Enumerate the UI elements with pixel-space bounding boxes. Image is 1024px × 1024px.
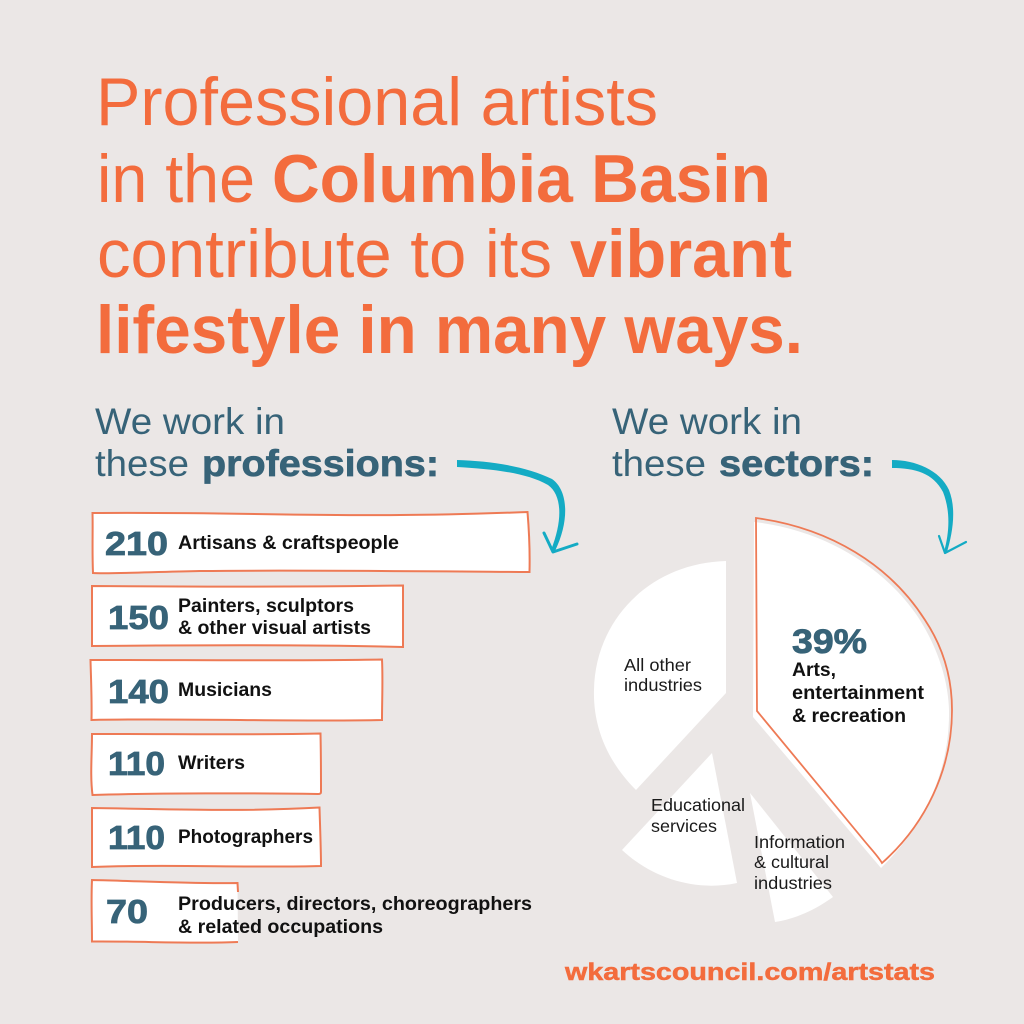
bar: musicians: 140 bbox=[108, 673, 169, 710]
bar: musicians bbox=[90, 660, 382, 721]
bar: artisans: Artisans & craftspeople bbox=[178, 533, 399, 554]
slice: educational services bbox=[622, 753, 745, 886]
slice: information and cultural industries: industries bbox=[754, 873, 832, 893]
bar: musicians: Musicians bbox=[178, 680, 272, 701]
slice: arts, entertainment and recreation: & recreation bbox=[792, 706, 906, 727]
bar: painters: & other visual artists bbox=[178, 618, 371, 639]
slice: arts, entertainment and recreation: 39% bbox=[792, 623, 867, 661]
slice: arts, entertainment and recreation bbox=[753, 518, 952, 868]
bar: producers: & related occupations bbox=[178, 917, 383, 938]
heading: professions: We work in bbox=[95, 401, 285, 442]
heading: sectors: sectors: bbox=[719, 443, 874, 484]
slice: information and cultural industries: & cultural bbox=[754, 852, 829, 872]
slice: information and cultural industries: Information bbox=[754, 832, 845, 852]
bar: writers: Writers bbox=[178, 753, 245, 774]
bar: artisans: 210 bbox=[105, 525, 168, 562]
bar: painters bbox=[92, 586, 403, 647]
bar: painters: Painters, sculptors bbox=[178, 596, 354, 617]
pie chart: sectors bbox=[594, 518, 952, 922]
slice: educational services: Educational bbox=[651, 795, 745, 815]
source link: wkartscouncil.com/artstats bbox=[564, 959, 935, 986]
bar: artisans bbox=[92, 512, 530, 573]
title: Professional artists bbox=[96, 64, 658, 140]
bar: photographers: Photographers bbox=[178, 827, 313, 848]
slice: arts, entertainment and recreation: Arts, bbox=[792, 660, 836, 681]
slice: educational services: services bbox=[651, 816, 717, 836]
slice: all other industries: All other bbox=[624, 655, 691, 675]
slice: information and cultural industries bbox=[750, 793, 845, 922]
slice: all other industries bbox=[594, 561, 726, 790]
heading: sectors: We work in bbox=[612, 401, 802, 442]
slice: arts, entertainment and recreation: entertainment bbox=[792, 683, 925, 704]
title: contribute to its bbox=[97, 216, 552, 292]
arrow: professions to bars bbox=[457, 460, 577, 552]
bar: producers: Producers, directors, choreographers bbox=[178, 894, 532, 915]
title bbox=[96, 64, 803, 368]
title: lifestyle in many ways. bbox=[96, 292, 803, 368]
bar: producers: 70 bbox=[106, 893, 148, 930]
heading: sectors: these bbox=[612, 443, 706, 484]
bar: photographers bbox=[92, 808, 321, 867]
bar: writers: 110 bbox=[108, 745, 165, 782]
heading: sectors bbox=[612, 401, 874, 484]
heading: professions: professions: bbox=[202, 443, 439, 484]
slice: all other industries: industries bbox=[624, 675, 702, 695]
arrow: sectors to pie bbox=[892, 460, 966, 553]
bar: painters: 150 bbox=[108, 599, 169, 636]
bar: photographers: 110 bbox=[108, 819, 165, 856]
title: vibrant bbox=[570, 216, 792, 292]
bar: writers bbox=[91, 734, 321, 795]
heading: professions bbox=[95, 401, 439, 484]
title: in the bbox=[97, 141, 255, 217]
bar: producers bbox=[92, 880, 532, 943]
title: Columbia Basin bbox=[272, 141, 771, 217]
heading: professions: these bbox=[95, 443, 189, 484]
